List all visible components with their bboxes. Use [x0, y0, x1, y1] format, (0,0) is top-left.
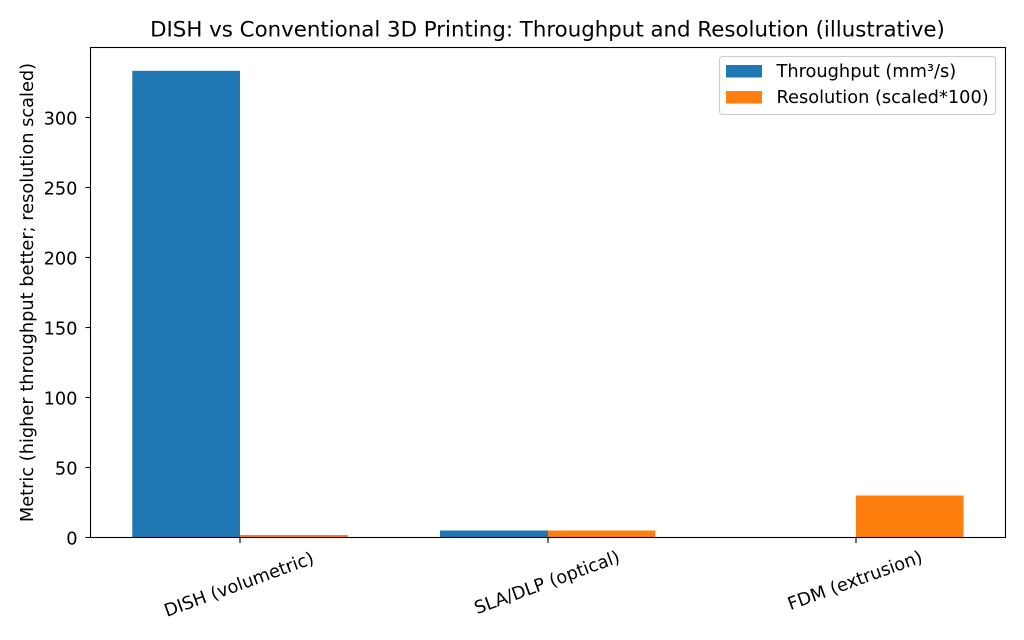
series: resolution bars	[240, 496, 964, 538]
legend item: throughput: Throughput (mm³/s)	[776, 61, 956, 82]
x axis label: SLA/DLP: SLA/DLP (optical)	[472, 547, 623, 619]
x axis label: FDM: FDM (extrusion)	[785, 547, 925, 615]
axes frame	[90, 48, 1006, 538]
x axis ticks	[240, 538, 856, 543]
y axis tick labels: 250	[44, 178, 78, 199]
legend	[720, 56, 996, 114]
y axis tick labels: 100	[44, 388, 78, 409]
y axis tick labels	[44, 108, 78, 549]
y axis tick labels: 150	[44, 318, 78, 339]
y axis tick labels: 50	[55, 458, 78, 479]
y axis ticks	[86, 118, 90, 538]
y axis tick labels: 200	[44, 248, 78, 269]
legend item: resolution: Resolution (scaled*100)	[776, 87, 989, 108]
x axis label: DISH: DISH (volumetric)	[161, 548, 317, 622]
series: throughput bars	[132, 71, 856, 538]
title: DISH vs Conventional 3D Printing: Throughput and Resolution (illustrative)	[150, 18, 945, 42]
y axis tick labels: 300	[44, 108, 78, 129]
y axis label: Metric (higher throughput better; resolution scaled)	[17, 63, 38, 522]
y axis tick labels: 0	[66, 528, 78, 549]
